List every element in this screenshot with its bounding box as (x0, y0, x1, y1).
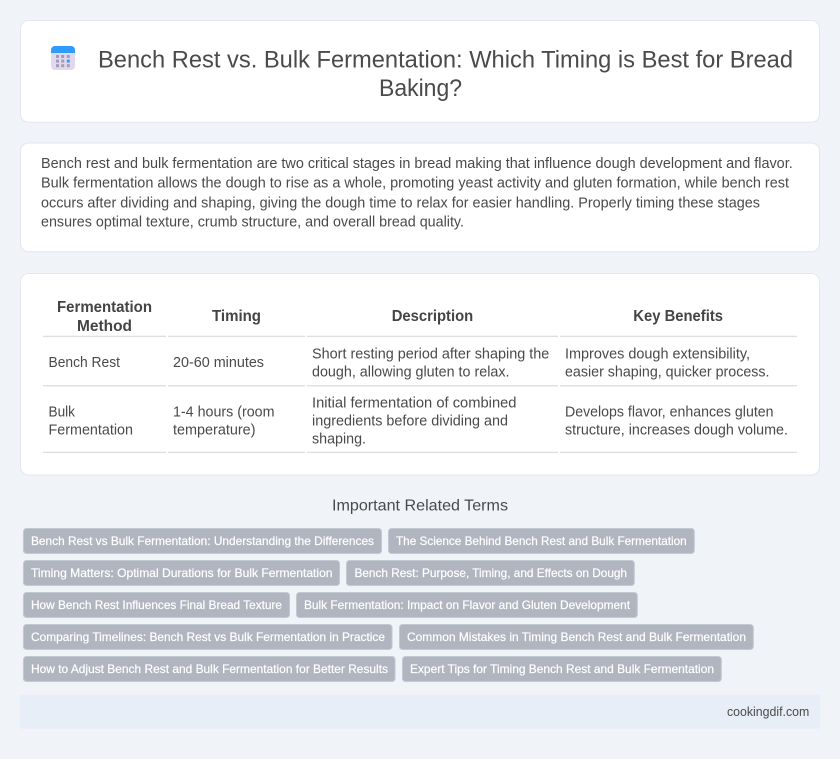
tag (24, 528, 382, 554)
table row: bulk fermentation: temperature) (173, 422, 256, 438)
table header row: Fermentation (57, 299, 152, 316)
tag (24, 656, 395, 682)
table row: bulk fermentation: ingredients before dividing and (312, 413, 508, 429)
table row: bench rest: 20-60 minutes (173, 355, 264, 371)
table row: bulk fermentation: shaping. (312, 431, 366, 447)
tag: Comparing Timelines: Bench Rest vs Bulk Fermentation in Practice (31, 630, 385, 644)
tag: How Bench Rest Influences Final Bread Texture (31, 598, 282, 612)
tag (24, 560, 340, 586)
panel: title header (20, 20, 820, 122)
tag: Bulk Fermentation: Impact on Flavor and Gluten Development (304, 598, 631, 612)
tag: Bench Rest: Purpose, Timing, and Effects on Dough (354, 566, 627, 580)
table row: bench rest (43, 346, 797, 386)
table row: bulk fermentation: Fermentation (48, 422, 133, 438)
intro paragraph: Bench rest and bulk fermentation are two critical stages in bread making that influence dough development and flavor. (41, 156, 793, 172)
table row: bulk fermentation: Initial fermentation of combined (312, 395, 516, 411)
table header row: Key Benefits (633, 308, 723, 325)
table header row: Description (392, 308, 473, 325)
table row: bench rest: easier shaping, quicker process. (565, 364, 770, 380)
table row: bulk fermentation (43, 395, 797, 453)
table row: bench rest: Short resting period after shaping the (312, 346, 549, 362)
intro paragraph: ensures optimal texture, crumb structure, and overall bread quality. (41, 214, 464, 230)
panel: comparison table (20, 274, 820, 475)
related terms tags (24, 528, 753, 682)
table row: bench rest: Bench Rest (48, 355, 120, 371)
icon: calendar (51, 46, 75, 70)
tag: Timing Matters: Optimal Durations for Bulk Fermentation (31, 566, 332, 580)
footer site name: cookingdif.com (727, 704, 809, 719)
tag: How to Adjust Bench Rest and Bulk Fermentation for Better Results (31, 662, 388, 676)
table row: bulk fermentation: Develops flavor, enhances gluten (565, 404, 774, 420)
tag (388, 528, 694, 554)
table row: bench rest: Improves dough extensibility, (565, 346, 750, 362)
panel: introduction (20, 143, 820, 252)
table row: bench rest: dough, allowing gluten to relax. (312, 364, 510, 380)
table row: bulk fermentation: structure, increases dough volume. (565, 422, 788, 438)
tag (24, 592, 290, 618)
table header row: Timing (212, 308, 261, 325)
table row: bulk fermentation: Bulk (48, 404, 76, 420)
tag (296, 592, 637, 618)
heading: related terms: Important Related Terms (332, 498, 508, 515)
title (98, 46, 793, 102)
footer (20, 695, 820, 729)
tag: Expert Tips for Timing Bench Rest and Bulk Fermentation (410, 662, 714, 676)
table row: bulk fermentation: 1-4 hours (room (173, 404, 275, 420)
tag: Bench Rest vs Bulk Fermentation: Understanding the Differences (31, 534, 374, 548)
table header row (43, 299, 797, 337)
intro paragraph: Bulk fermentation allows the dough to rise as a whole, promoting yeast activity and gluten formation, while bench rest (41, 176, 789, 192)
tag (24, 624, 392, 650)
intro paragraph (41, 156, 793, 230)
title: Baking? (379, 75, 462, 102)
intro paragraph: occurs after dividing and shaping, giving the dough time to relax for easier handling. Properly timing these stages (41, 196, 760, 212)
tag: The Science Behind Bench Rest and Bulk Fermentation (396, 534, 687, 548)
title: Bench Rest vs. Bulk Fermentation: Which Timing is Best for Bread (98, 46, 793, 74)
tag (346, 560, 634, 586)
tag: Common Mistakes in Timing Bench Rest and Bulk Fermentation (407, 630, 746, 644)
tag (400, 624, 753, 650)
table header row: Method (77, 318, 132, 335)
tag (402, 656, 721, 682)
